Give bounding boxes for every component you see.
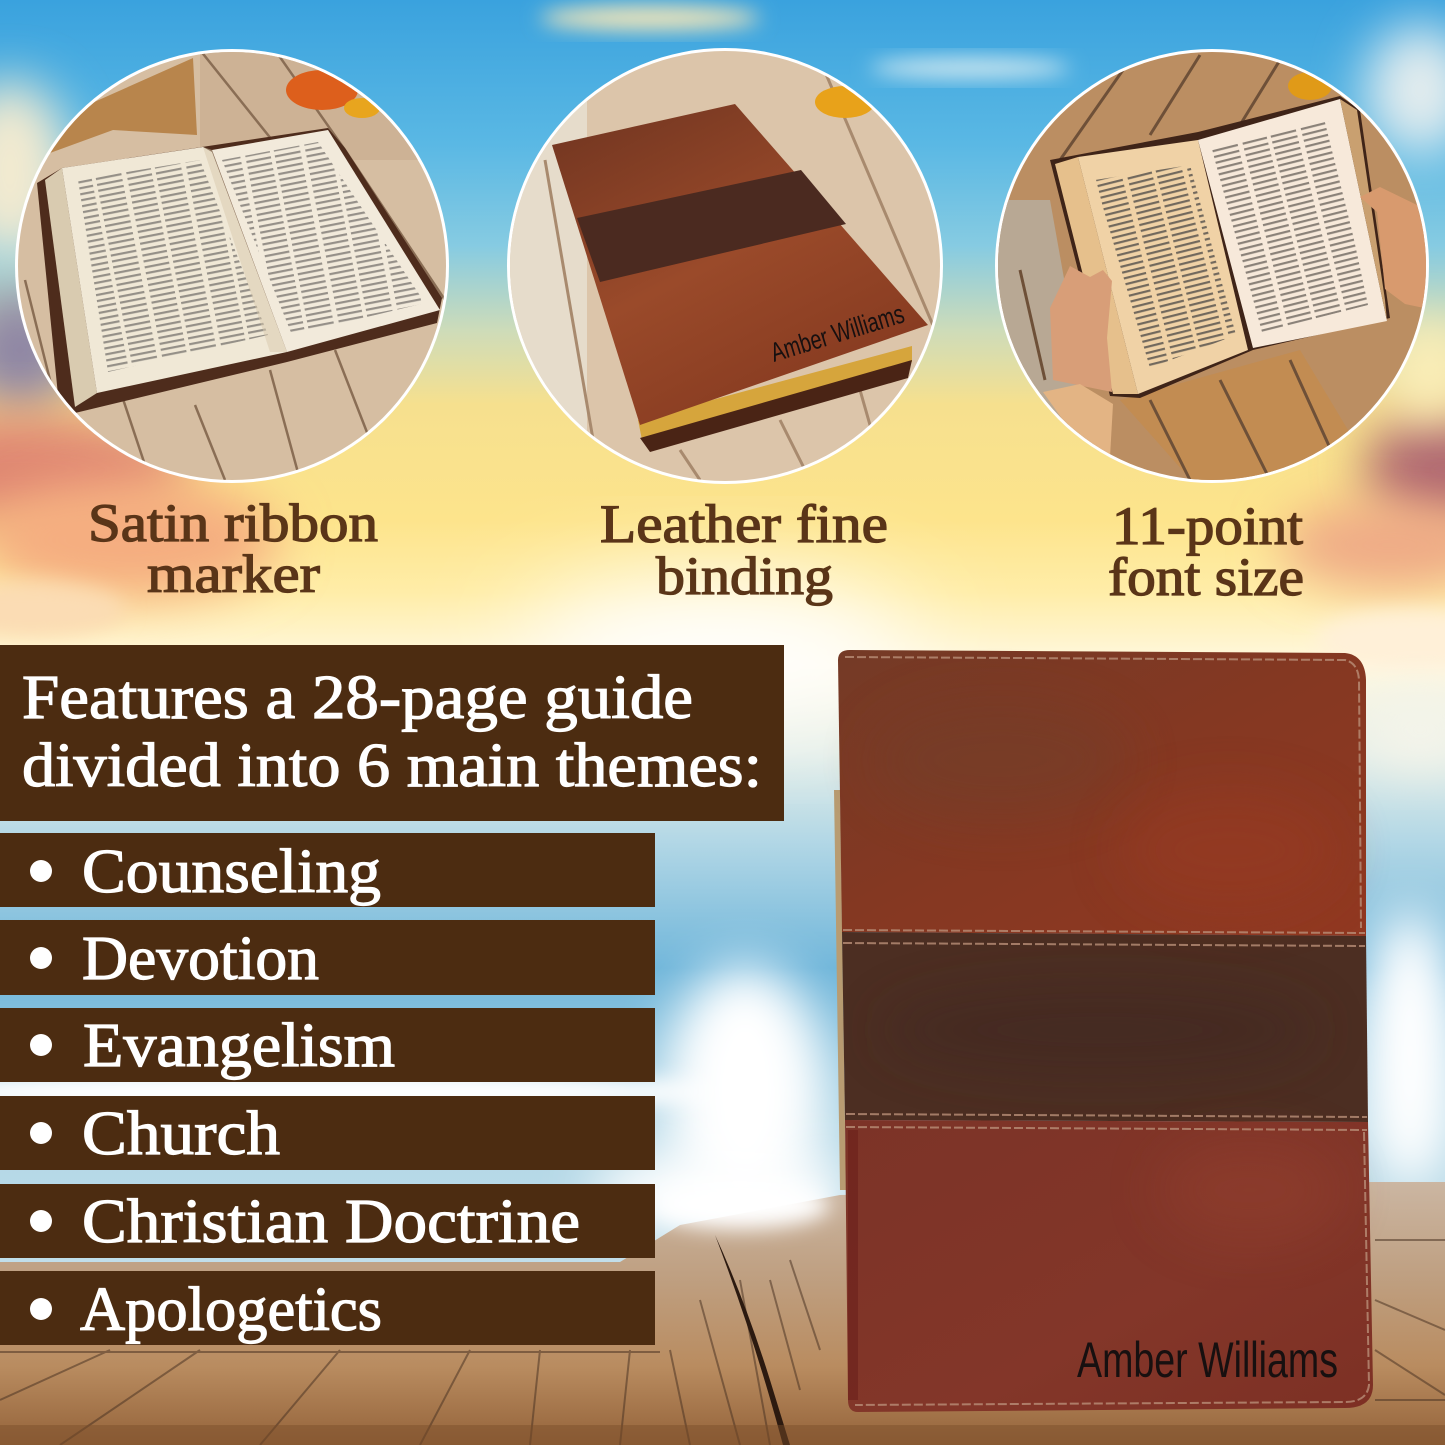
imprinted name on cover: Amber Williams xyxy=(767,299,908,368)
photo circle: open Bible with ribbon marker xyxy=(15,49,450,485)
heading panel: 28-page guide: divided into 6 main themes: xyxy=(22,732,762,800)
stitching xyxy=(843,657,1369,1405)
caption: satin ribbon marker: marker xyxy=(147,544,320,604)
flower xyxy=(286,70,380,118)
flower xyxy=(1288,72,1332,100)
photo circle: hands holding open Bible xyxy=(995,49,1430,490)
heading panel: 28-page guide xyxy=(0,645,784,821)
caption: satin ribbon marker xyxy=(88,493,378,604)
theme: Counseling: Counseling xyxy=(82,838,381,906)
gold page edge xyxy=(638,346,912,440)
theme: Devotion xyxy=(0,920,655,995)
cover dark band xyxy=(842,932,1368,1122)
wooden table xyxy=(0,1181,1445,1445)
leather shading xyxy=(848,700,1340,1400)
theme: Apologetics xyxy=(0,1271,655,1345)
caption: 11-point font size: font size xyxy=(1108,547,1304,607)
theme: Evangelism: Evangelism xyxy=(83,1012,395,1080)
theme: Apologetics: Apologetics xyxy=(80,1276,382,1344)
flower xyxy=(815,86,875,118)
theme: Christian Doctrine: Christian Doctrine xyxy=(82,1188,580,1256)
spine page edge xyxy=(834,790,846,1190)
caption: 11-point font size xyxy=(1108,496,1304,607)
theme: Church xyxy=(0,1096,655,1170)
cover xyxy=(552,104,928,425)
caption: leather fine binding: Leather fine xyxy=(600,494,888,554)
cover band xyxy=(577,170,846,282)
left hand xyxy=(1050,266,1112,392)
caption: leather fine binding: binding xyxy=(656,546,833,606)
caption: 11-point font size: 11-point xyxy=(1112,496,1303,556)
theme: Evangelism xyxy=(0,1008,655,1082)
cover bottom section xyxy=(845,1120,1373,1412)
imprinted name: Amber Williams xyxy=(1077,1332,1338,1388)
caption: leather fine binding xyxy=(600,494,888,606)
theme list xyxy=(0,833,655,1345)
photo circle: leather cover with imprinted name xyxy=(507,48,950,484)
theme: Church: Church xyxy=(82,1100,280,1168)
burlap cloth xyxy=(50,58,197,153)
theme: Counseling xyxy=(0,833,655,907)
caption: satin ribbon marker: Satin ribbon xyxy=(88,493,378,553)
open book xyxy=(1050,96,1390,398)
left sleeve xyxy=(1043,384,1113,457)
right hand xyxy=(1360,187,1429,308)
large Bible cover xyxy=(834,650,1373,1412)
theme: Christian Doctrine xyxy=(0,1184,655,1258)
theme: Devotion: Devotion xyxy=(82,925,319,993)
heading panel: 28-page guide: Features a 28-page guide xyxy=(22,664,693,732)
open book xyxy=(37,128,442,413)
cover top section xyxy=(838,650,1366,936)
